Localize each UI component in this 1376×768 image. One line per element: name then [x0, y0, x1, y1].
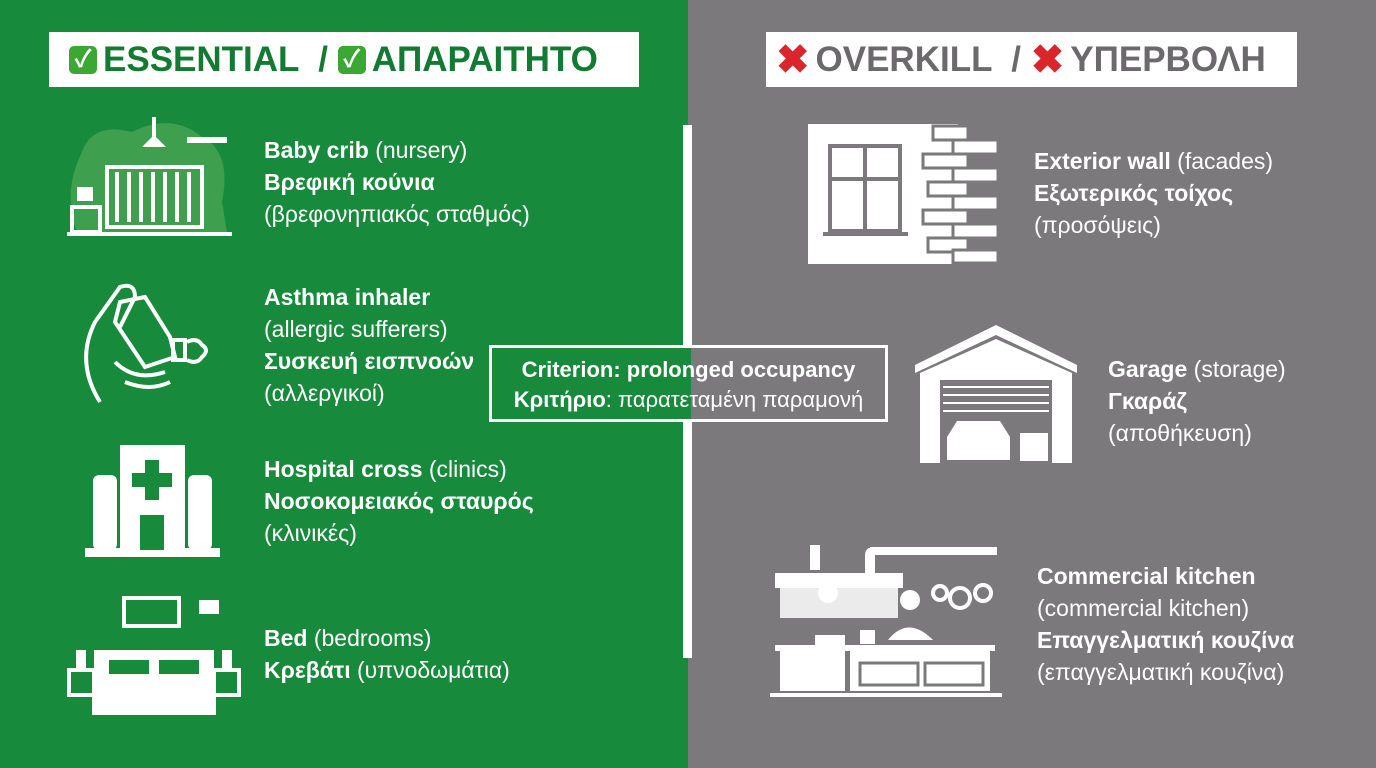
- heading: essential: ✓: [74, 46, 92, 73]
- icon: commercial kitchen: [770, 545, 1002, 697]
- divider line: [683, 125, 692, 658]
- text: baby crib: [264, 137, 530, 227]
- text: garage: Garage (storage): [1108, 356, 1286, 382]
- icon: garage: [915, 325, 1077, 463]
- text: asthma inhaler: Συσκευή εισπνοών: [264, 348, 474, 374]
- icon: bed: [67, 596, 241, 715]
- text: commercial kitchen: Επαγγελματική κουζίνα: [1037, 627, 1294, 653]
- text: asthma inhaler: (allergic sufferers): [264, 316, 448, 342]
- icon: exterior wall: [808, 124, 996, 264]
- text: exterior wall: Exterior wall (facades): [1034, 148, 1273, 174]
- text: commercial kitchen: (commercial kitchen): [1037, 595, 1249, 621]
- text: asthma inhaler: Asthma inhaler: [264, 284, 430, 310]
- text: hospital cross: [264, 456, 534, 546]
- text: commercial kitchen: (επαγγελματική κουζίνα): [1037, 659, 1284, 685]
- text: hospital cross: Hospital cross (clinics): [264, 456, 507, 482]
- heading: overkill: ✖OVERKILL / ✖ΥΠΕΡΒΟΛΗ: [776, 38, 1266, 82]
- callout: criterion: [489, 345, 888, 422]
- text: bed: Κρεβάτι (υπνοδωμάτια): [264, 657, 510, 683]
- icon: crib: [67, 117, 232, 236]
- heading: essential: [49, 32, 639, 87]
- text: exterior wall: [1034, 148, 1273, 238]
- text: bed: Bed (bedrooms): [264, 625, 431, 651]
- text: baby crib: Βρεφική κούνια: [264, 169, 435, 195]
- text: exterior wall: (προσόψεις): [1034, 212, 1161, 238]
- text: commercial kitchen: Commercial kitchen: [1037, 563, 1256, 589]
- text: bed: [264, 625, 510, 683]
- text: garage: (αποθήκευση): [1108, 420, 1252, 446]
- text: commercial kitchen: [1037, 563, 1294, 685]
- icon: hospital: [85, 445, 220, 557]
- callout: criterion: Κριτήριο: παρατεταμένη παραμονή: [514, 387, 863, 412]
- text: garage: Γκαράζ: [1108, 388, 1187, 414]
- heading: essential: ESSENTIAL / ΑΠΑΡΑΙΤΗΤΟ: [103, 40, 598, 79]
- callout: criterion: Criterion: prolonged occupancy: [522, 357, 855, 382]
- text: hospital cross: (κλινικές): [264, 520, 357, 546]
- text: baby crib: (βρεφονηπιακός σταθμός): [264, 201, 530, 227]
- text: baby crib: Baby crib (nursery): [264, 137, 467, 163]
- text: hospital cross: Νοσοκομειακός σταυρός: [264, 488, 534, 514]
- text: garage: [1108, 356, 1286, 446]
- text: exterior wall: Εξωτερικός τοίχος: [1034, 180, 1233, 206]
- text: asthma inhaler: [264, 284, 474, 406]
- icon: inhaler: [84, 284, 208, 403]
- heading: essential: ✓: [343, 46, 360, 73]
- text: asthma inhaler: (αλλεργικοί): [264, 380, 385, 406]
